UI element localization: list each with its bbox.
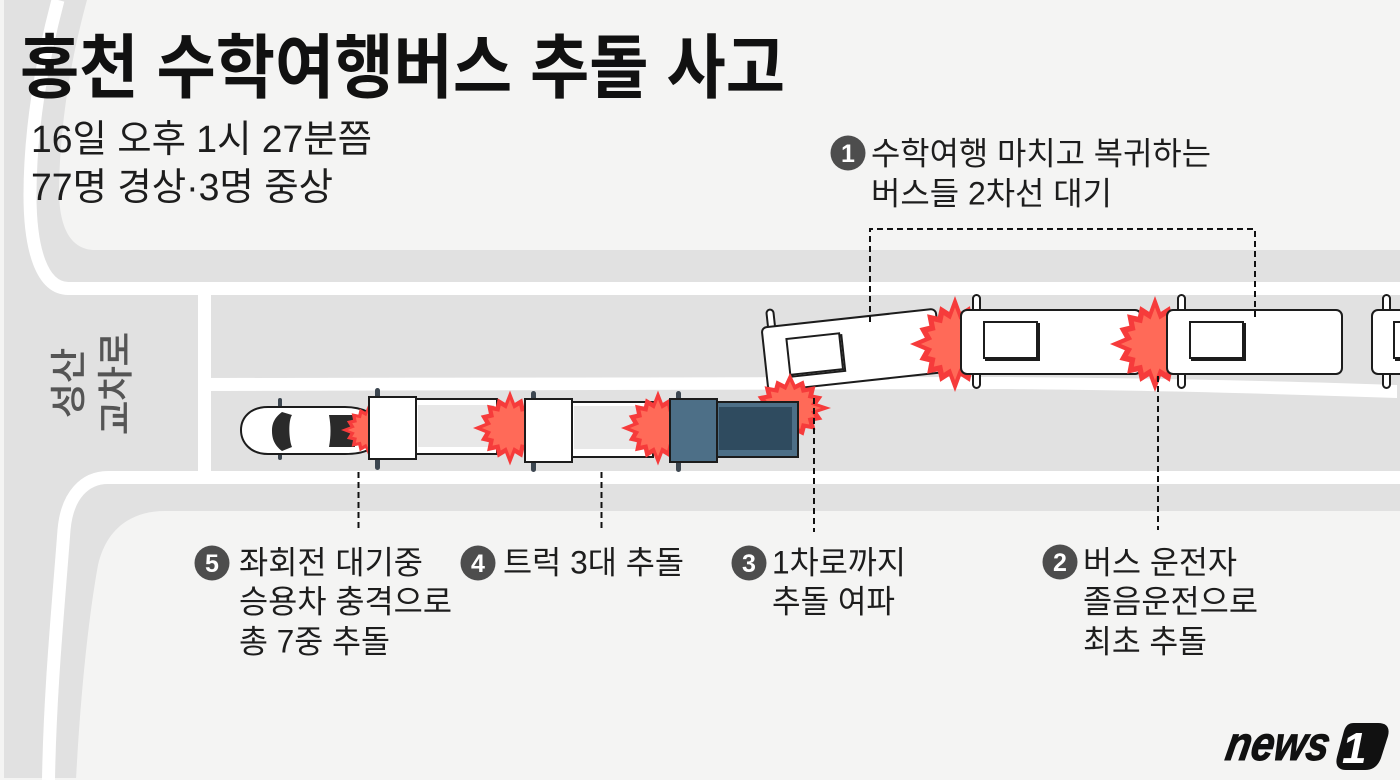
label: 성산 교차로: 교차로: [95, 332, 136, 435]
bus 2: [961, 295, 1141, 388]
callout 4: 4: [471, 550, 485, 578]
burst: truck 1 and truck 2: [473, 390, 547, 466]
burst: bus 2 and bus 3: [1110, 296, 1200, 392]
logo: news1: news: [1222, 717, 1335, 771]
car: [241, 398, 368, 460]
burst: car and truck 1: [341, 403, 397, 457]
callout 5: 승용차 충격으로: [239, 584, 452, 620]
callout 3: 1차로까지: [772, 544, 906, 580]
truck 3 (blue): [670, 391, 798, 472]
callout 2: 버스 운전자: [1083, 544, 1237, 580]
callout 4: 트럭 3대 추돌: [503, 544, 684, 580]
callout 2: 2: [1053, 549, 1067, 577]
burst: truck 3 and bus 1: [749, 373, 831, 443]
subtitle: 77명 경상·3명 중상: [31, 167, 333, 209]
callout 1: 버스들 2차선 대기: [871, 176, 1112, 212]
label: 성산 교차로: [48, 332, 136, 435]
callout 3: 추돌 여파: [772, 584, 895, 620]
callout 2: [1042, 544, 1258, 660]
callout leaders: [358, 229, 1255, 532]
callout 5: 총 7중 추돌: [239, 624, 390, 660]
callout 2: 졸음운전으로: [1083, 584, 1258, 620]
callout 5: [194, 544, 452, 660]
callout 1: 1: [841, 140, 855, 168]
callout 3: [732, 544, 906, 620]
bus 3: [1167, 295, 1342, 388]
truck 1: [369, 388, 497, 470]
callout 1: [830, 136, 1211, 212]
callout 3: 3: [742, 550, 756, 578]
burst: truck 2 and truck 3: [621, 390, 695, 466]
bus 1: tilted bus: [760, 292, 942, 391]
callout 5: 5: [205, 550, 219, 578]
truck 2: [525, 391, 653, 472]
callout 2: 최초 추돌: [1083, 624, 1207, 660]
burst: bus 1 and bus 2: [910, 296, 1000, 392]
bus 4 (cut off at the right edge): [1372, 295, 1400, 388]
callout 1: 수학여행 마치고 복귀하는: [871, 136, 1211, 172]
label: 성산 교차로: 성산: [48, 348, 89, 418]
callout 5: 좌회전 대기중: [239, 544, 423, 580]
title: 홍천 수학여행버스 추돌 사고: [20, 29, 785, 107]
subtitle: 16일 오후 1시 27분쯤: [31, 119, 372, 161]
logo: news1: 1: [1342, 724, 1366, 773]
subtitle: [31, 119, 372, 209]
